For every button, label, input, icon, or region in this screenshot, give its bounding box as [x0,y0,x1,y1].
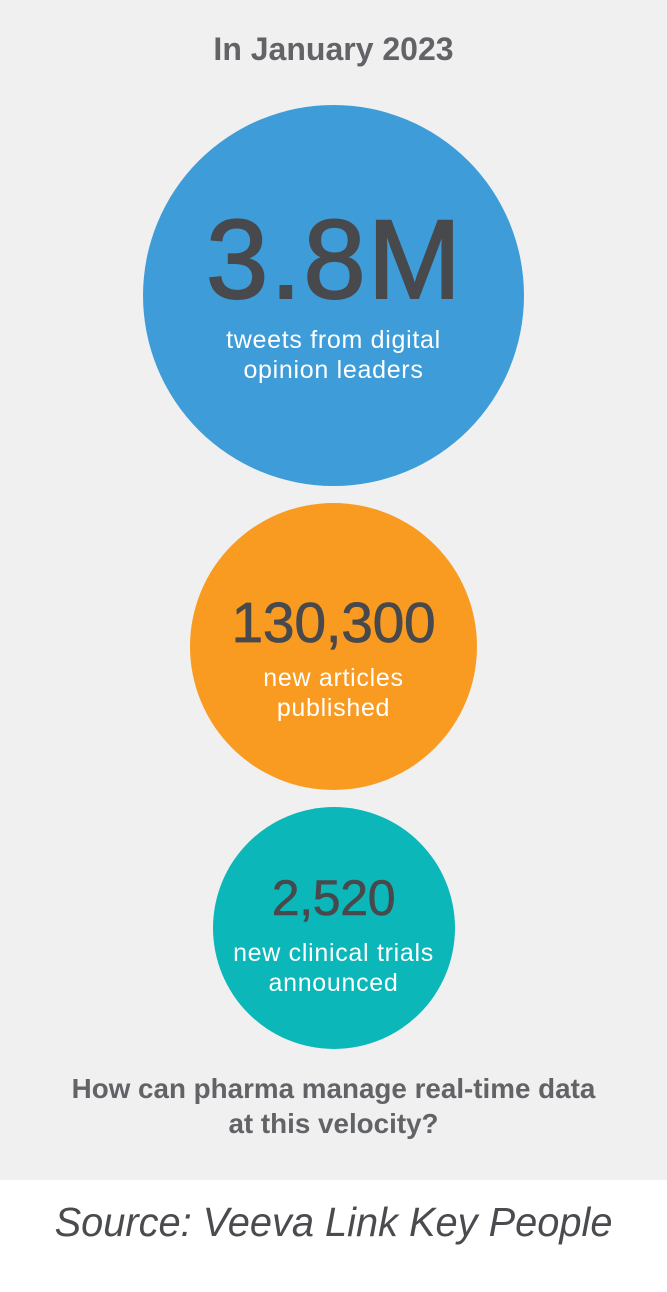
label: articles: new articles [263,664,404,692]
question text [72,1073,596,1139]
panel: trials circle [212,807,454,1049]
stat: 2,520: 2,520 [272,870,395,926]
question text: How can pharma manage real-time data [72,1073,595,1104]
panel: articles circle [190,503,477,790]
label: tweets: tweets from digital [226,326,441,354]
label: trials [233,939,434,997]
label: trials: announced [268,969,399,997]
question text: at this velocity? [228,1108,439,1139]
title: In January 2023 [213,31,454,67]
label: articles [263,664,404,722]
stat: 3.8M: 3.8M [206,197,463,322]
panel: tweets circle [143,105,524,486]
label: tweets [226,326,441,384]
label: articles: published [277,694,390,722]
source: Source: Veeva Link Key People [55,1199,612,1245]
label: trials: new clinical trials [233,939,434,967]
stat: 130,300: 130,300 [232,591,435,655]
label: tweets: opinion leaders [243,356,424,384]
